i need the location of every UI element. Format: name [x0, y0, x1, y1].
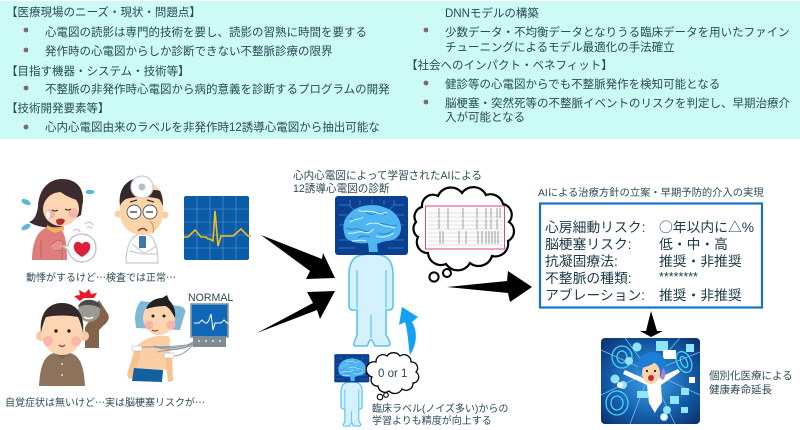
arrow: upper left to AI [261, 235, 335, 279]
icon: ECG machine with NORMAL screen: NORMAL [188, 292, 233, 304]
text column: left [6, 5, 390, 134]
row: stroke risk: 低・中・高 [659, 236, 728, 252]
continued text: DNN model: DNNモデルの構築 [445, 6, 539, 20]
row: arrhythmia type: ******** [659, 270, 698, 284]
text column: right [406, 6, 790, 124]
thought bubble: 0 or 1 [366, 353, 419, 400]
icon: small brain panel [334, 354, 369, 382]
row: stroke risk: 脳梗塞リスク: [545, 237, 632, 252]
row: atrial fibrillation risk [545, 216, 754, 236]
icon: personalized medicine illustration [601, 338, 700, 424]
figure: AI person with brain head [335, 196, 408, 346]
chart: 12-lead ECG trace [426, 206, 504, 249]
bullet: fine tuning: 少数データ・不均衡データとなりうる臨床データを用いたファイン [445, 25, 790, 39]
row: ablation [545, 287, 742, 303]
caption: personalized medicine: 個別化医療による [709, 369, 793, 382]
bullet list: needs: 発作時の心電図からしか診断できない不整脈診療の限界 [45, 44, 333, 58]
bullet list: technical elements: 心内心電図由来のラベルを非発作時12誘導心電図から抽出可能な [45, 120, 380, 134]
caption: clinical label comparison: 学習よりも精度が向上する [372, 414, 492, 427]
caption: personalized medicine: 健康寿命延長 [709, 383, 772, 396]
bullet list: impact: 脳梗塞・突然死等の不整脈イベントのリスクを判定し、早期治療介 [445, 96, 790, 110]
panel: project summary [0, 1, 800, 139]
caption: personalized medicine [709, 369, 793, 396]
caption: AI diagnosis: 心内心電図によって学習されたAIによる [293, 169, 482, 182]
icon: doctor [114, 176, 168, 263]
icon: ECG monitor panel [184, 196, 251, 260]
icon: man having ECG taken [127, 295, 193, 382]
bullet list: impact: 入が可能となる [445, 110, 525, 124]
bullet: fine tuning [424, 25, 790, 54]
row: atrial fibrillation risk: ○年以内に△% [659, 216, 754, 236]
row: atrial fibrillation risk: 心房細動リスク: [545, 220, 645, 235]
caption: AI diagnosis [293, 169, 482, 195]
heading: treatment strategy: AIによる治療方針の立案・早期予防的介入の実現 [538, 186, 764, 199]
icon: worried man behind [74, 289, 109, 348]
row: anticoagulation: 抗凝固療法: [545, 253, 618, 269]
thought bubble: 0 or 1: 0 or 1 [378, 368, 407, 380]
icon: brain panel [335, 196, 408, 255]
bullet list: impact: 健診等の心電図からでも不整脈発作を検知可能となる [445, 77, 720, 91]
row: arrhythmia type: 不整脈の種類: [545, 271, 632, 286]
caption: palpitations: 動悸がするけど…検査では正常… [26, 269, 176, 284]
row: anticoagulation: 推奨・非推奨 [659, 254, 742, 269]
row: ablation: アブレーション: [545, 287, 645, 303]
caption: AI diagnosis: 12誘導心電図の診断 [293, 182, 390, 195]
icon: woman with palpitations [20, 179, 96, 262]
thought bubble: 12-lead ECG [413, 187, 514, 282]
icon: older man [36, 303, 89, 386]
heading: needs: 【医療現場のニーズ・現状・問題点】 [6, 5, 201, 19]
caption: asymptomatic: 自覚症状は無いけど…実は脳梗塞リスクが… [5, 394, 205, 409]
caption: clinical label comparison [372, 402, 508, 427]
arrow: AI to output [447, 271, 532, 302]
heading: target: 【目指す機器・システム・技術等】 [6, 64, 190, 78]
arrow: blue curved feedback [399, 307, 418, 355]
row: arrhythmia type [545, 270, 698, 286]
bullet list: target: 不整脈の非発作時心電図から病的意義を診断するプログラムの開発 [45, 82, 390, 96]
arrow: down to personalized medicine [640, 311, 663, 337]
caption: clinical label comparison: 臨床ラベル(ノイズ多い)からの [372, 402, 508, 415]
heading: impact: 【社会へのインパクト・ベネフィット】 [406, 58, 613, 72]
row: ablation: 推奨・非推奨 [659, 288, 742, 303]
bullet: fine tuning: チューニングによるモデル最適化の手法確立 [445, 40, 675, 54]
row: anticoagulation [545, 253, 742, 269]
row: stroke risk [545, 236, 728, 252]
bullet list: impact [424, 77, 790, 124]
figure: small person with clinical label [334, 354, 369, 426]
heading: technical elements: 【技術開発要素等】 [6, 101, 110, 115]
arrow: lower left to AI [257, 291, 335, 333]
bullet list: needs: 心電図の読影は専門的技術を要し、読影の習熟に時間を要する [45, 25, 367, 39]
icon: ECG machine with NORMAL screen [188, 292, 233, 347]
bullet list: needs [24, 25, 367, 58]
panel: AI output results [540, 204, 762, 308]
